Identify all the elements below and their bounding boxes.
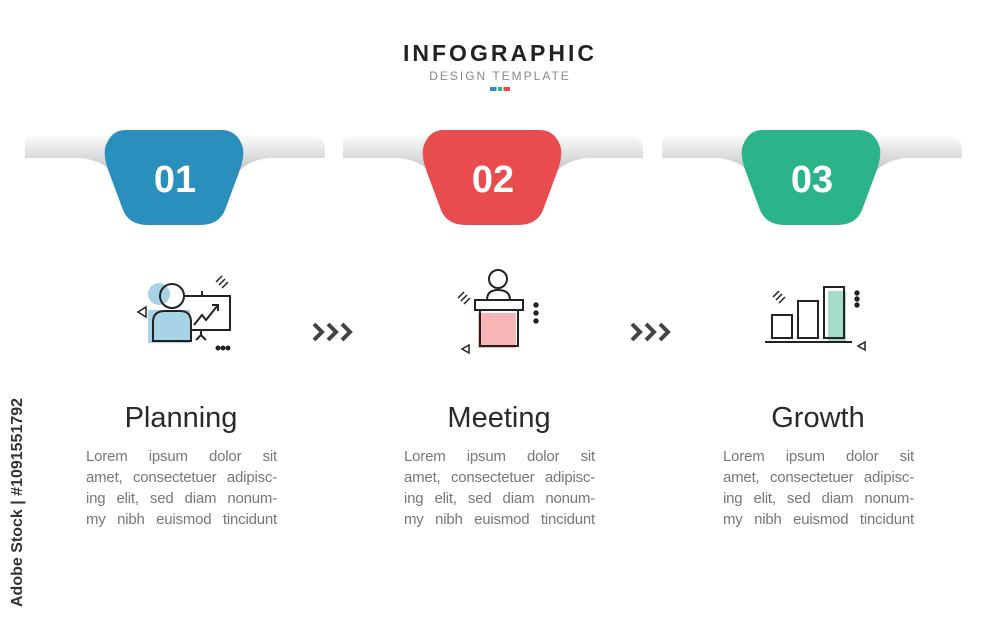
badge 02	[343, 130, 643, 225]
text: meeting: amet, consectetuer adipisc-	[404, 469, 595, 486]
badge 01	[25, 130, 325, 225]
text: meeting: Lorem ipsum dolor sit	[404, 448, 595, 465]
text: meeting: my nibh euismod tincidunt	[404, 511, 595, 528]
text: planning: ing elit, sed diam nonum-	[86, 490, 277, 507]
title	[403, 40, 597, 91]
title: DESIGN TEMPLATE	[429, 69, 571, 83]
text: meeting: ing elit, sed diam nonum-	[404, 490, 595, 507]
icon: meeting	[458, 270, 538, 353]
badges	[25, 130, 962, 225]
badge 03: 03	[791, 159, 833, 201]
icon: growth	[765, 287, 865, 350]
side watermark text: Adobe Stock | #1091551792	[9, 398, 26, 607]
text: planning: Lorem ipsum dolor sit	[86, 448, 277, 465]
arrow 1	[314, 324, 350, 340]
text: growth	[723, 448, 914, 528]
heading: Meeting: Meeting	[447, 402, 551, 434]
heading: Growth: Growth	[771, 402, 865, 434]
text: planning	[86, 448, 278, 528]
title: INFOGRAPHIC	[403, 40, 597, 66]
text: growth: ing elit, sed diam nonum-	[723, 490, 914, 507]
badge 01: 01	[154, 159, 196, 201]
text: growth: amet, consectetuer adipisc-	[723, 469, 914, 486]
icons and arrows	[136, 269, 866, 354]
text: planning: amet, consectetuer adipisc-	[86, 469, 277, 486]
text: growth: my nibh euismod tincidunt	[723, 511, 914, 528]
icon: planning	[138, 276, 230, 350]
arrow 2	[632, 324, 668, 340]
text: growth: Lorem ipsum dolor sit	[723, 448, 914, 465]
badge 02: 02	[472, 159, 514, 201]
badge 03	[662, 130, 962, 225]
text: meeting	[404, 448, 596, 528]
heading: Planning: Planning	[125, 402, 237, 434]
text: planning: my nibh euismod tincidunt	[86, 511, 277, 528]
